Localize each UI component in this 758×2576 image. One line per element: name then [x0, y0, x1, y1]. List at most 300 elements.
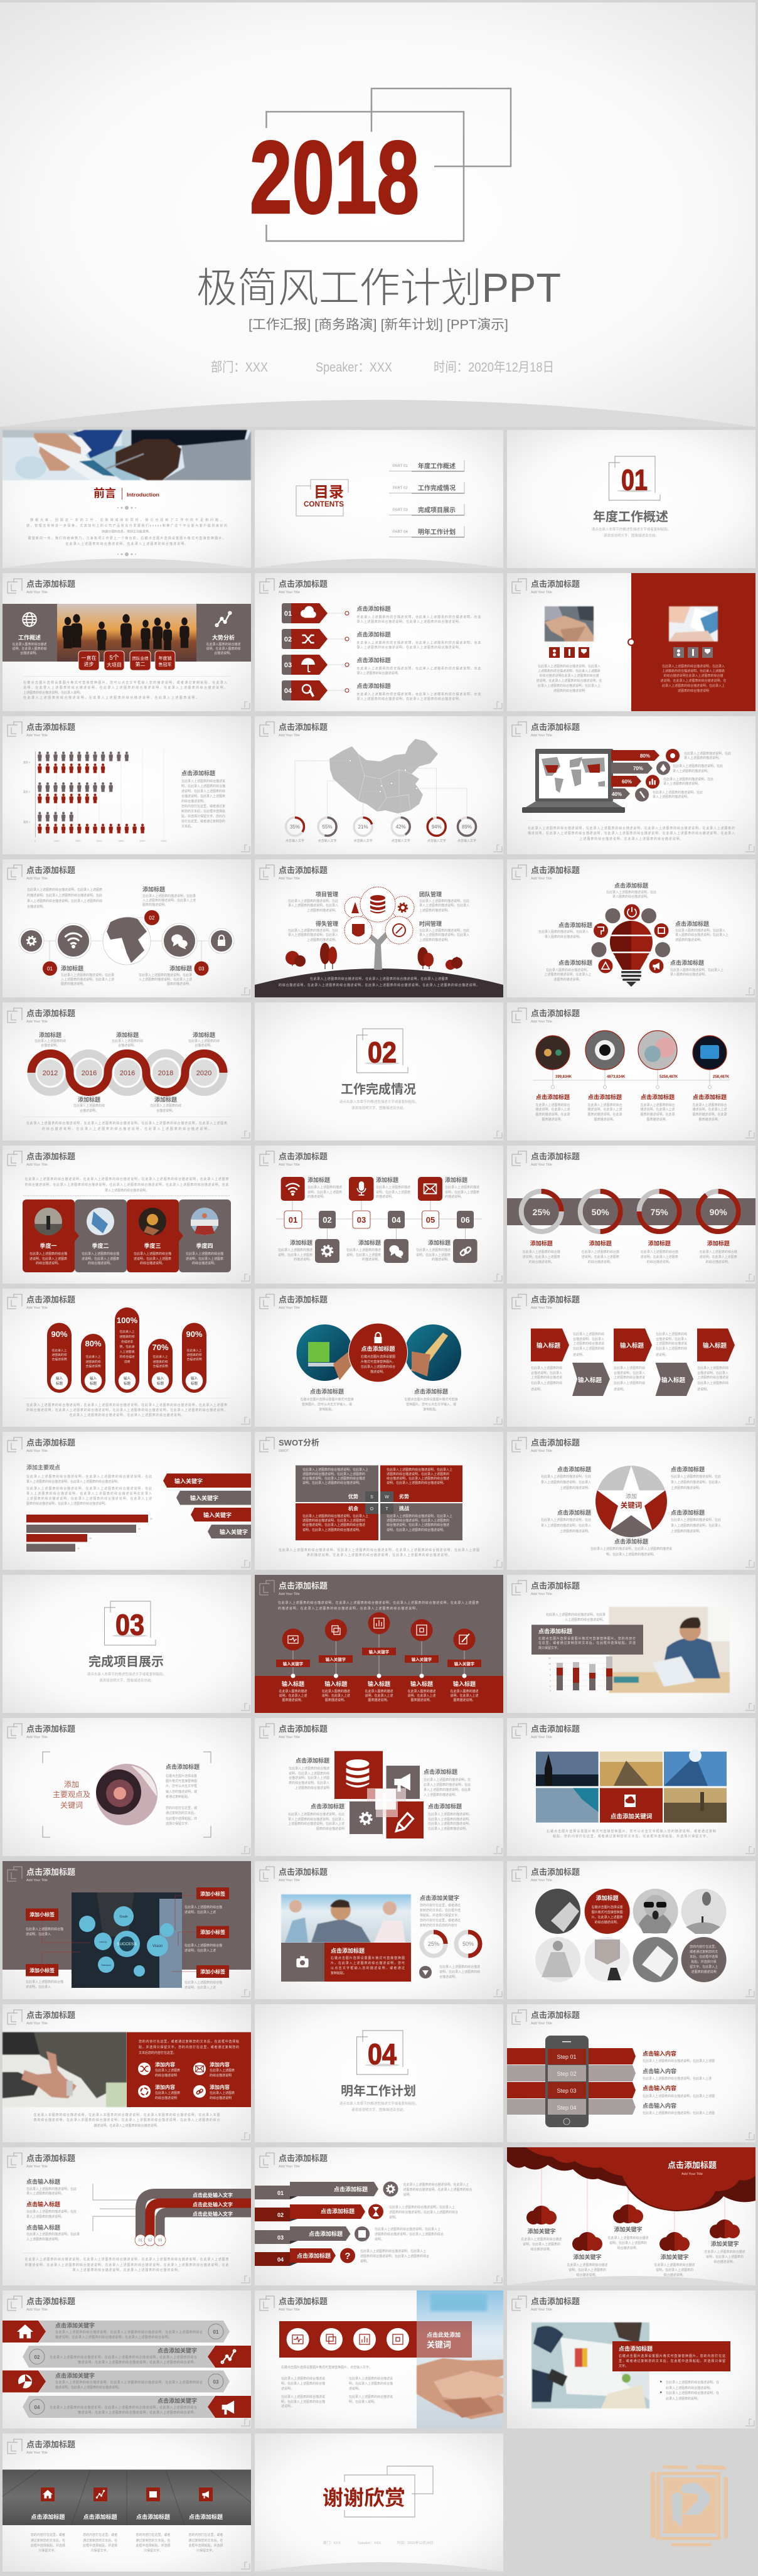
- overlay text: 关键词: [427, 2340, 451, 2349]
- item text: 图表描述说明。: [542, 1117, 564, 1122]
- circle item text: 在此录入上述图表: [155, 2068, 180, 2073]
- bottom notes: 添加标题: [428, 1239, 451, 1246]
- caption block: [281, 1943, 411, 1982]
- red caption box: [612, 2341, 730, 2371]
- red band: [279, 2321, 417, 2358]
- curtain red layer: [526, 2147, 755, 2210]
- pictogram chart: 6000: [161, 839, 167, 842]
- strings: [542, 2163, 725, 2232]
- curtain heading: 点击添加标题: [668, 2160, 717, 2170]
- row 1: 描述说明，在此录入上述图表的综合描述说明，在此录入上述图表的综合说明。: [55, 2335, 171, 2339]
- red wave: [31, 1053, 223, 1092]
- taupe box: 点击添加标题: [538, 1628, 572, 1634]
- taupe box: 右键点击图片选择设置图片格式可直接替换图片。您的内容打: [538, 1636, 636, 1641]
- red panel text: 贴，并选择只保留文字。您的内容打在这里，或者通过复制您的: [139, 2045, 239, 2049]
- note right: 右键点击图片选择设置图片格式可直接: [404, 1397, 458, 1402]
- bottom notes: 说明，在此录入上述图表: [346, 1253, 381, 1257]
- heading: [26, 1438, 75, 1453]
- label tags: 添加小标签: [29, 1911, 55, 1918]
- ring notes: 的综合描述说明。: [706, 1260, 731, 1264]
- intro text: 的描述说明，在此录入上述图表的综合描述说明，在此录入上述图表的综合描述说明。: [278, 1606, 419, 1611]
- right text: 复制您的文本后，在此框中选: [420, 1908, 461, 1913]
- card text: 在此录入上述图表的综合描: [82, 1252, 119, 1256]
- ring notes: 述说明，在此录入上述图表: [641, 1255, 678, 1259]
- row 3: 点击添加关键字: [55, 2372, 95, 2379]
- note 02: [142, 886, 196, 907]
- side text: 您的内容打在这里，或: [166, 1806, 197, 1810]
- capsule text: 在此录入上: [51, 1348, 67, 1353]
- heading: 点击添加标题: [279, 2154, 328, 2163]
- diamond note: 说明，在此录入上述图表的综: [439, 1970, 480, 1974]
- capsule discs: 输入: [191, 1376, 198, 1381]
- center red circle: 右键点击图片选择设置图: [361, 1355, 395, 1359]
- panel: slide quarter cards: [3, 1146, 251, 1284]
- photo: success gears: Teamwork: [101, 1964, 111, 1967]
- panel: slide capsule columns: [3, 1289, 251, 1427]
- heading: Add Your Title: [279, 2308, 300, 2312]
- heading: [26, 2297, 75, 2312]
- row 3: 描述说明，在此录入上述图表的综合描述说明。: [55, 2385, 121, 2390]
- side text: 输入您的描述说明，或: [166, 1790, 197, 1794]
- capsule text: 在此录入上: [119, 1329, 135, 1334]
- columns of text: 述说明。: [281, 2386, 294, 2391]
- heading: Add Your Title: [531, 1879, 552, 1882]
- label tags: [26, 1887, 229, 1978]
- side text: 片。您可以点击文字框: [166, 1784, 197, 1788]
- thanks meta: 部门：XXX: [323, 2540, 341, 2545]
- photo: success gears: Lead by: [99, 1941, 107, 1943]
- arrow labels: [536, 1342, 727, 1384]
- step arrows: [507, 2048, 636, 2115]
- number boxes: 06: [461, 1215, 470, 1225]
- heading: 点击添加标题: [531, 579, 580, 589]
- curtain heading: [668, 2160, 717, 2176]
- arrow labels: 输入标题: [578, 1377, 602, 1384]
- tags: 进步: [84, 662, 94, 667]
- panel: slide light bulb: [507, 859, 755, 997]
- pipe labels: 点击此处输入文字: [193, 2211, 233, 2217]
- capsule text: 在此录入上: [85, 1355, 101, 1359]
- tags: 售冠军: [158, 662, 172, 667]
- bottom labels: [73, 1096, 181, 1113]
- note right upper: 点击添加标题: [675, 920, 709, 927]
- cloud notes: 在此录入上述图表的综合描述: [567, 2263, 608, 2267]
- cover meta: Speaker：XXX: [316, 360, 392, 375]
- keyword tags: 输入关键字: [190, 1495, 218, 1501]
- note bottom left: 录入上述图表的综合描述说明，在此录入: [288, 1817, 344, 1822]
- chart description: 制您的文本后，在此框中选择粘: [181, 809, 225, 813]
- body text blocks: 在此录入上述图表的综: [614, 1366, 645, 1370]
- capsule discs: 输入: [56, 1376, 63, 1381]
- heading: [531, 866, 580, 881]
- ribbon 02: [255, 2204, 458, 2221]
- bottom labels: 合描述说明。: [156, 1108, 175, 1113]
- top notes: 添加标题: [445, 1176, 467, 1183]
- panel: slide tree: [255, 859, 503, 997]
- section subtitle: 请添加说明文字、图像描述及总结。: [99, 1678, 154, 1683]
- note top: 在此录入上述图表的描述说明，在此: [606, 890, 656, 894]
- diamond note: [419, 1965, 480, 1979]
- note top: 录入图表的综合描述说明。: [612, 894, 650, 899]
- star chart: 关键词: [621, 1501, 642, 1510]
- ribbon 04: 述图表的综合描述说明，在此录入上述图表的综合: [360, 2254, 429, 2258]
- curtain dark layer: [507, 2147, 755, 2211]
- tags: 5个: [109, 654, 119, 662]
- right text: 择粘贴，并选择只保留文字。: [420, 1913, 461, 1918]
- paragraph: 粘贴。您的内容打在这里，或者通过复制您的文本后，在此框中选择粘贴，并选择只保留文字。: [553, 1834, 710, 1838]
- heading: Add Your Title: [531, 2308, 552, 2312]
- note gains: 录入上述图表的描述说明，在此录入: [288, 933, 338, 937]
- icon: trend: [216, 612, 231, 626]
- caption block: 点击添加标题: [331, 1947, 365, 1954]
- right text: [420, 1894, 461, 1928]
- top labels: 合描述说明。: [41, 1043, 60, 1048]
- top notes: [307, 1176, 479, 1199]
- bar chart: 90: [150, 1518, 152, 1520]
- body text blocks: 在此录入上述图表的综: [573, 1332, 604, 1336]
- key message: 添加: [64, 1780, 79, 1789]
- note 01: 图表的描述说明。: [61, 982, 86, 986]
- tree trunk: [363, 927, 393, 970]
- note right upper: 在此录入图表的描述说明，在此录入: [675, 928, 725, 933]
- bullets: 此录入上述图表的综合描述说明。: [666, 2386, 713, 2390]
- caption block: 以点击文字框输入您的描述说明，或者通过: [331, 1966, 405, 1970]
- card titles: 季度四: [196, 1242, 213, 1249]
- heading: 点击添加标题: [531, 1438, 580, 1447]
- chart description: 您的内容打在这里，或者通过复: [181, 804, 225, 808]
- heading: 点击添加标题: [26, 2297, 75, 2306]
- row 1: [3, 2321, 230, 2343]
- step titles: 点击输入内容: [643, 2068, 676, 2074]
- heading: Add Your Title: [26, 1163, 48, 1167]
- pictogram chart: 类别 1: [23, 820, 31, 824]
- text left: 上述图表的综合描述说明，在此录入上述图表: [538, 669, 601, 673]
- bottom titles: 输入标题: [368, 1680, 390, 1687]
- note right: 点击添加标题: [414, 1388, 448, 1395]
- column text: 您的内容打在这里，或者: [83, 2533, 117, 2537]
- row 1: 01: [213, 2329, 219, 2335]
- arrow bars: 40%: [612, 792, 622, 797]
- body text blocks: 在此录入上述图表的综: [656, 1346, 687, 1351]
- heading: Add Your Title: [531, 2022, 552, 2026]
- card text: 述说明，在此录入上述图表: [134, 1257, 171, 1261]
- capsule discs: 输入: [157, 1376, 164, 1381]
- phone: [545, 2036, 589, 2127]
- SWOT quadrants: 优势: [348, 1493, 358, 1500]
- thanks meta: Speaker：XXX: [358, 2541, 381, 2545]
- ribbon 01: 说明。: [403, 2192, 413, 2197]
- notes left: 点击添加标题: [557, 1509, 591, 1516]
- red circle text: 右键点击图片选择设置: [592, 1905, 623, 1909]
- bottom notes: 的描述说明。: [432, 1257, 451, 1262]
- pipe numbers: [139, 2239, 163, 2243]
- note left lower: 点击添加标题: [558, 959, 592, 966]
- chart description: 明，在此录入上述图表的综合描: [181, 784, 225, 788]
- chart description: 在此录入上述图表的综合描述说: [181, 779, 225, 783]
- note 02: 在此录入上述图表的描述说明，在此录: [142, 894, 196, 898]
- panel: slide hex rows: [3, 2290, 251, 2428]
- tag notes on white: 述说明，在此录入: [26, 1985, 51, 1989]
- note left: 复制粘贴。: [319, 1407, 335, 1412]
- ring notes: 在此录入上述图表的综合描: [523, 1250, 560, 1254]
- SWOT quadrants: 综合描述说明，在此录入上述图表的综合描述: [302, 1476, 365, 1481]
- card titles: 季度二: [92, 1242, 109, 1249]
- SWOT quadrants: 挑战: [399, 1505, 409, 1511]
- text above box: 入上述图表的综合描述说明。: [565, 1618, 606, 1622]
- note 03: 在此录入上述图表的描述说明，在此录: [139, 973, 192, 977]
- SWOT quadrants: 述图表的综合描述说明，在此录入上述图表的: [387, 1518, 449, 1523]
- cloud notes: 说明，在此录入上述图表的: [609, 2241, 647, 2245]
- values: 258,487K: [713, 1075, 730, 1079]
- bottom text: 图表描述说明。: [282, 1698, 304, 1702]
- text left: 在此录入上述图表的综合描述说明，在此录入: [538, 664, 601, 668]
- pipe numbers: 02: [148, 2239, 152, 2243]
- column text: 通过复制您的文本后，在: [83, 2538, 117, 2543]
- body text blocks: 上述图表的综合描述说: [531, 1375, 562, 1380]
- heading: 点击添加标题: [279, 579, 328, 589]
- stacked bar chart: [548, 1656, 612, 1692]
- stacked bar chart: 0: [550, 1690, 551, 1692]
- heading: 点击添加标题: [279, 866, 328, 875]
- step notes: 在此录入上述图表的综合描述说明，在此录入上述: [643, 2076, 712, 2081]
- circles with icons: [635, 749, 680, 802]
- panel: slide percentage rings: [507, 1146, 755, 1284]
- number badges: 02: [149, 915, 155, 921]
- circle item text: 的综合描述说明: [155, 2073, 177, 2078]
- paragraph: 在此录入上述图表的综合描述说明，在此录入上述图表的综合描述说明，在此: [26, 1486, 152, 1491]
- bottom text: 图表描述说明。: [453, 1698, 476, 1702]
- item text: 图表的描述说明，在此录: [640, 1112, 675, 1117]
- percentages: 90%: [51, 1329, 68, 1339]
- left notes: 录入上述图表的描述说明。: [26, 2214, 64, 2219]
- heading: 点击添加标题: [26, 1724, 75, 1734]
- heading: [279, 722, 328, 738]
- photo: success gears: SUCCESS: [117, 1942, 137, 1946]
- divider and paragraph: [528, 820, 735, 841]
- heading: [26, 866, 75, 881]
- body text blocks: 述说明。: [531, 1387, 543, 1392]
- ribbon 04: 04: [277, 2257, 284, 2263]
- heading: 点击添加标题: [26, 1867, 75, 1877]
- text: left work overview: 说明，在此录入图表的综: [12, 647, 47, 651]
- panel: slide stepped ribbons: [255, 2147, 503, 2285]
- tree crown circles: [344, 887, 414, 944]
- left notes: 在此录入上述图表的描述说明，在此录: [26, 2232, 80, 2236]
- star chart: [595, 1466, 667, 1537]
- note top right: [424, 1768, 471, 1797]
- body text blocks: 上述图表的综合描述说: [656, 1341, 687, 1346]
- panel: slide wood band: [3, 2434, 251, 2572]
- heading: preface: [93, 487, 159, 500]
- text left: 的综合描述说明在此录入上述图表的综合描: [539, 674, 599, 678]
- card text: 述说明，在此录入上述图表: [186, 1257, 223, 1261]
- paragraph: 表的描述说明，在此录入上述图表的综合描述说明，在此录入上述图表的综合描述说明。: [307, 1553, 451, 1557]
- cloud notes: 综合描述说明。: [663, 2273, 686, 2277]
- note 03: [139, 965, 192, 986]
- text on hill: 在此录入上述图表的综合描述说明，在此录入上述图表的综合描述说明，在此录入上述图表: [310, 977, 448, 981]
- thanks meta: [323, 2540, 433, 2545]
- step titles: [643, 2050, 676, 2109]
- taupe box: 在这里，或者通过复制您的文本后，在此框中选择粘贴。并选: [538, 1641, 636, 1645]
- panel: slide gears photo: [3, 1861, 251, 1999]
- note bottom left: 在此录入上述图表的综合描述说明，在此: [288, 1812, 344, 1817]
- notes right: 在此录入上述图表的描述说明，在此: [671, 1474, 721, 1479]
- divider and paragraph: 在此录入上述图表的综合描述说明，在此录入上述图表的综合描述说明，在此录入上述图表的综合描述说明，在此录入上述图表的: [528, 826, 735, 830]
- heading: 点击添加标题: [26, 2010, 75, 2020]
- arrow bars: [611, 750, 659, 799]
- chart description: 贴，并选择只保留文字。您的内: [181, 814, 225, 818]
- tag notes on white: 在此录入上述图表的综合描: [26, 1980, 63, 1984]
- panel: slide office meeting photo: [507, 2290, 755, 2428]
- keyword tags: 输入关键字: [174, 1478, 203, 1484]
- paragraph below: 表的综合描述说明，在此录入本图表的综合描述说明，在此录入上述图表的综合描述说明，在此录入上述图表的综合: [34, 2118, 220, 2122]
- step labels: Step 03: [557, 2088, 577, 2094]
- stacked bar chart: 4: [550, 1680, 551, 1682]
- ribbon 03: 在此录入上述图表的综合描述说明，在此录入上: [375, 2227, 440, 2231]
- values: [555, 1075, 730, 1079]
- bottom text: 说明，在此录入上述: [322, 1693, 350, 1698]
- step titles: 点击输入内容: [643, 2102, 676, 2109]
- ring notes: 的综合描述说明。: [529, 1260, 554, 1264]
- column text: 通过复制您的文本后，在: [188, 2538, 223, 2543]
- capsule text: 合描述说明: [85, 1364, 101, 1368]
- top notes: 在此录入上述图表的描述: [307, 1185, 342, 1189]
- stacked bar chart: 8: [550, 1668, 551, 1671]
- divider and paragraph: 的综合描述说明，在此录入上述图表的综合描述说明，在此录入上述图表的综合描述说明。: [42, 1127, 211, 1131]
- lower circles: 本后，在此框中选择: [690, 1955, 718, 1959]
- cloud icon square: [624, 1795, 636, 1807]
- circle item text: 的综合描述说明: [210, 2096, 232, 2100]
- heading: 点击添加标题: [531, 1867, 580, 1877]
- label tags: 添加小标签: [200, 1891, 225, 1897]
- SWOT quadrants: 说明，在此录入上述图表的综合描述说明。: [387, 1528, 446, 1532]
- top labels: 添加标题: [116, 1031, 139, 1038]
- body text blocks: 上述图表的综合描述说: [573, 1341, 604, 1346]
- arrow labels: 输入标题: [620, 1342, 644, 1350]
- side text: 通过复制您的文本后，: [166, 1811, 197, 1815]
- lower circles: 或者通过复制您的文: [690, 1950, 718, 1954]
- panel: slide four photo circles: [507, 1002, 755, 1140]
- heading: Add Your Title: [26, 1879, 48, 1882]
- heading: 点击添加标题: [26, 866, 75, 875]
- note right lower: 在此录入图表的描述说明，在此录入上: [670, 968, 723, 972]
- columns of text: 述说明。: [281, 2404, 294, 2408]
- panel: slide city photo grid: [507, 1718, 755, 1856]
- chart description: 合描述说明，在此录入上述图表: [181, 794, 225, 798]
- heading: Add Your Title: [531, 591, 552, 594]
- paragraph: 在此录入上述图表的综合描述说明，在此录入上述图表的综合描述说明，在此: [26, 1474, 152, 1479]
- capsule discs: 标题: [90, 1381, 97, 1386]
- notes left: 点击添加标题: [557, 1466, 591, 1473]
- column text: 只保留文字。: [91, 2548, 110, 2553]
- keyword tags: 输入关键字: [283, 1661, 304, 1666]
- bar chart: 50: [89, 1537, 92, 1540]
- top labels: [35, 1031, 220, 1048]
- panel: slide split red: [507, 573, 755, 711]
- arrow bars: 60%: [622, 779, 632, 785]
- bottom notes: 添加标题: [358, 1239, 381, 1246]
- body text blocks: 述说明。: [656, 1353, 668, 1357]
- notes left: 在此录入上述图表的描述说明，在此: [541, 1518, 591, 1522]
- divider and paragraph: 的描述说明，在此录入上述图表的综合描述说明，在此录入上述图表的综合描述说明，在此录入上述图表的综合描述说明，在此: [25, 2263, 228, 2267]
- section subtitle: 请点击录入本章节的概述性描述文字或者复制粘贴，: [87, 1672, 166, 1677]
- arrow bars: 70%: [633, 766, 643, 771]
- item 02: 在此录入上述图表的综合描述说明，在此录入上述图表的综合描述说明，在此: [356, 640, 481, 645]
- heading: [531, 1581, 580, 1596]
- ribbon 02: 述图表的综合描述说明，在此录入上述图表的综合: [389, 2210, 458, 2214]
- cloud notes: 说明，在此录入上述图表的: [706, 2255, 744, 2259]
- note top right: 此录入上述图表的描述说明，在此: [424, 1783, 471, 1787]
- top labels: 合描述说明。: [118, 1043, 137, 1048]
- card text: 在此录入上述图表的综合描: [29, 1252, 67, 1256]
- map leader lines: [295, 761, 467, 815]
- heading: [279, 1438, 319, 1453]
- body text blocks: 述说明。: [697, 1387, 710, 1392]
- heading: 点击添加标题: [26, 2154, 75, 2163]
- section subtitle: 请点击录入本章节的概述性描述文字或者复制粘贴，: [592, 527, 671, 532]
- red small trees: [286, 943, 462, 970]
- intro text: 的综合描述说明，在此录入上述图表的综合描述说明，在此录入上述图表的综合描述说明，在此录入上述图表的综合描述说明，在此: [25, 1183, 228, 1187]
- dots divider: [117, 506, 136, 510]
- big year 2018: 2018: [250, 120, 419, 235]
- divider and paragraph: 在此录入上述图表的综合描述说明，在此录入上述图表的综合描述说明，在此录入上述图表说明。: [23, 695, 199, 700]
- body text blocks: 合描述说明，在此录入: [697, 1371, 729, 1375]
- bottom labels: 添加标题: [154, 1096, 177, 1103]
- heading: [26, 1724, 75, 1739]
- side text: [166, 1763, 200, 1826]
- note team: 上述图表的描述说明。: [419, 908, 451, 913]
- diamond note: 在此录入上述图表的综合描述: [439, 1965, 480, 1969]
- bar chart: 80: [138, 1528, 141, 1530]
- side text: 点击添加标题: [166, 1763, 200, 1770]
- chart description: 文本后。: [181, 824, 194, 829]
- left notes: 点击输入标题: [26, 2178, 60, 2185]
- note right lower: 点击添加标题: [670, 959, 704, 966]
- heading: 点击添加标题: [279, 1295, 328, 1304]
- side text: 者通过复制粘贴。: [166, 1795, 191, 1799]
- cloud notes: 说明，在此录入上述图表的: [523, 2242, 560, 2246]
- heading: 点击添加标题: [279, 1581, 328, 1591]
- note right upper: [675, 920, 729, 942]
- step notes: 在此录入上述图表的综合描述说明，在此录入上述图: [643, 2111, 715, 2115]
- cloud labels: 添加关键字: [660, 2253, 689, 2260]
- taupe band: [3, 604, 251, 662]
- note left lower: 上述图表的描述说明，在此录入上: [544, 972, 592, 977]
- bottom text: 在此录入图表的描述: [450, 1689, 479, 1693]
- note left: 右键点击图片选择设置图片格式可直接: [300, 1397, 354, 1402]
- note top left: 说明，在此录入上述图表的综: [289, 1771, 329, 1776]
- photo: signing document: [669, 606, 718, 641]
- body text blocks: 合描述说明，在此录入: [656, 1337, 687, 1341]
- upper circles: [535, 1889, 727, 1934]
- step labels: Step 01: [557, 2054, 577, 2060]
- heading: [26, 1867, 75, 1882]
- left photo circle: [296, 1324, 353, 1381]
- SWOT quadrants: 在此录入上述图表的综合描述说明，在此录入上: [302, 1468, 368, 1472]
- SWOT quadrants: 述图表的综合描述说明，在此录入上述图表的: [302, 1518, 365, 1523]
- photo: top-down meeting: [531, 2322, 649, 2408]
- percentages: 100%: [117, 1316, 138, 1325]
- note time: [419, 920, 469, 942]
- ribbon 01: [255, 2182, 472, 2199]
- heading: Add Your Title: [531, 1736, 552, 1739]
- notes right: 点击添加标题: [671, 1466, 705, 1473]
- capsule text: 述图表的综: [85, 1360, 101, 1364]
- note left upper: 在此录入图表的描述说明，在此录入: [538, 930, 589, 934]
- cloud labels: 添加关键字: [710, 2240, 739, 2247]
- heading: Add Your Title: [279, 1879, 300, 1882]
- translucent overlay: [417, 2321, 472, 2358]
